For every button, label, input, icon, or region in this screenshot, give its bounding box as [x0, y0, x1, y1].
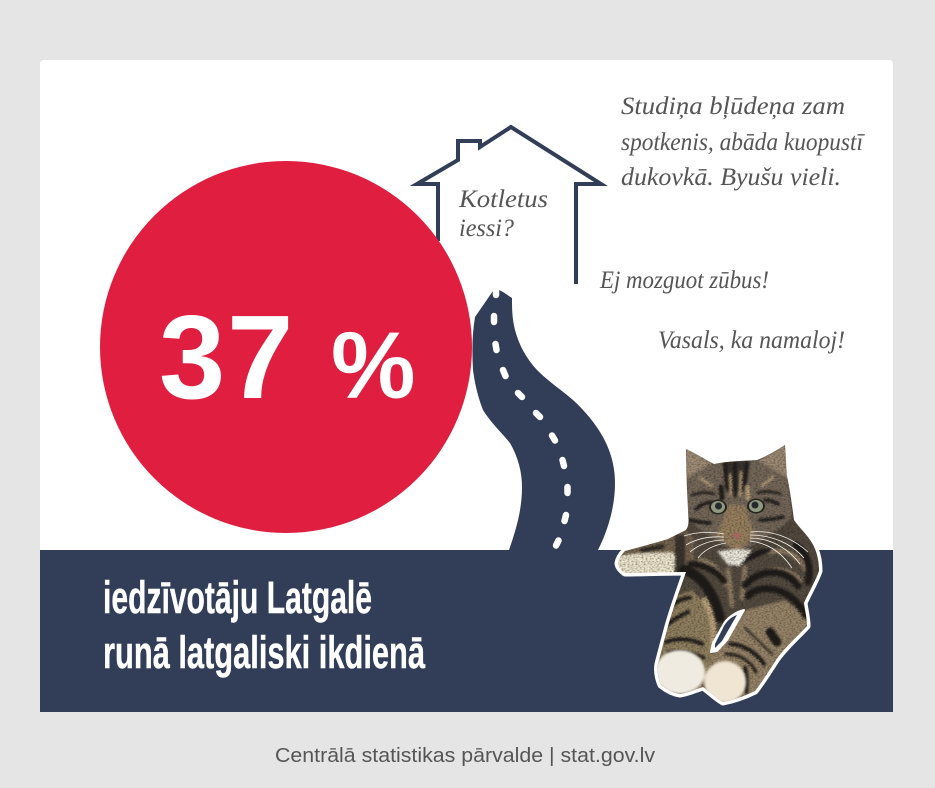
- speech text: house: iessi?: [459, 215, 514, 242]
- speech text: healthy: Vasals, ka namaloj!: [658, 327, 845, 354]
- nose: [732, 533, 742, 541]
- headline: runā latgaliski ikdienā: [103, 627, 426, 678]
- icon: winding road: [472, 288, 615, 550]
- body light streaks: [700, 551, 806, 605]
- panel: navy bottom band: [40, 550, 893, 712]
- speech text: top paragraph: [621, 93, 865, 191]
- eyes: [709, 498, 765, 514]
- dark body stripes: [664, 545, 809, 692]
- cat white outline: [618, 445, 819, 702]
- head light streaks: [700, 472, 773, 498]
- cat fur: [618, 445, 819, 702]
- speech text: top paragraph: Studiņa bļūdeņa zam: [621, 93, 845, 120]
- body base: [632, 445, 819, 702]
- speech text: top paragraph: dukovkā. Byušu vieli.: [621, 164, 841, 191]
- outstretched arm: [621, 530, 695, 566]
- gap between the legs: [711, 610, 744, 652]
- headline: iedzīvotāju Latgalē: [103, 572, 372, 623]
- footer source: Centrālā statistikas pārvalde | stat.gov.lv: [275, 745, 655, 767]
- big number: %: [331, 313, 415, 419]
- icon: tabby cat: [610, 440, 825, 710]
- whiskers: [684, 532, 808, 568]
- panel: white card: [40, 60, 893, 712]
- icon: house outline: [417, 127, 601, 284]
- forehead dark patch: [722, 461, 750, 492]
- chest: [717, 549, 752, 566]
- cheek tufts: [687, 521, 730, 550]
- left foreleg: [655, 590, 716, 690]
- headline: [103, 572, 426, 678]
- speech text: house: Kotletus: [458, 186, 548, 213]
- speech text: house: [458, 186, 548, 242]
- paws: [655, 650, 746, 703]
- muzzle: [716, 505, 756, 553]
- speech text: brush teeth: Ej mozguot zūbus!: [599, 267, 769, 294]
- head: [686, 460, 792, 552]
- red circle with percentage: [100, 161, 472, 533]
- speech text: top paragraph: spotkenis, abāda kuopustī: [621, 129, 865, 156]
- ears: [686, 449, 712, 481]
- big number: 37: [159, 291, 295, 424]
- right foreleg: [712, 600, 812, 696]
- head stripes: [690, 463, 783, 523]
